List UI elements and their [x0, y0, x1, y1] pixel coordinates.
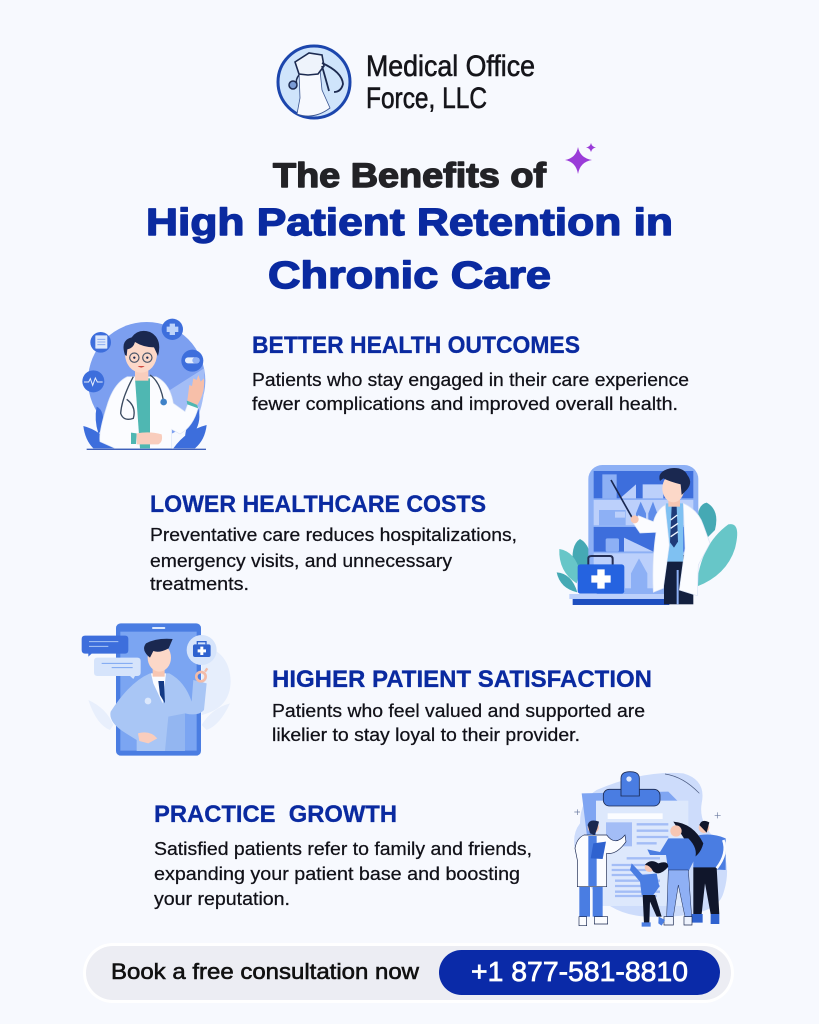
- icon: clipboard bubble: [90, 332, 111, 353]
- section: better health outcomes: Patients who stay engaged in their care experience: [252, 370, 689, 390]
- chat bubble dark: [82, 636, 128, 657]
- section: higher patient satisfaction: likelier to stay loyal to their provider.: [272, 725, 580, 745]
- title: Chronic Care: [268, 255, 551, 297]
- section: higher patient satisfaction: [272, 666, 652, 745]
- figure: doctor: [575, 821, 626, 926]
- phone number button: [439, 950, 720, 995]
- section: practice growth: expanding your patient base and boosting: [154, 864, 520, 884]
- phone number button: +1 877-581-8810: [471, 956, 688, 987]
- section: practice growth: Satisfied patients refer to family and friends,: [154, 839, 532, 859]
- logo emblem: [278, 46, 350, 118]
- icon: pulse bubble: [82, 370, 104, 392]
- illustration: doctor with health icons: [82, 319, 207, 450]
- section: lower healthcare costs: emergency visits, and unnecessary: [150, 551, 452, 571]
- title: [146, 157, 673, 297]
- title: High Patient Retention in: [146, 202, 673, 244]
- clipboard clip: [603, 772, 660, 806]
- section: better health outcomes: [252, 332, 689, 414]
- icon: medical cross bubble: [162, 319, 183, 340]
- title: The Benefits of: [273, 157, 547, 195]
- logo wordmark: Force, LLC: [366, 82, 487, 115]
- icon: medical kit bubble: [187, 635, 217, 665]
- illustration: doctor on tablet: [82, 623, 231, 756]
- section: lower healthcare costs: [150, 491, 517, 594]
- chat bubble light: [94, 658, 141, 679]
- section: practice growth: your reputation.: [154, 889, 290, 909]
- section: lower healthcare costs: LOWER HEALTHCARE COSTS: [150, 491, 486, 518]
- section: higher patient satisfaction: HIGHER PATIENT SATISFACTION: [272, 666, 652, 693]
- section: better health outcomes: BETTER HEALTH OUTCOMES: [252, 332, 580, 359]
- logo: [278, 46, 535, 118]
- figure: woman: [647, 822, 703, 925]
- section: practice growth: [154, 801, 532, 909]
- section: lower healthcare costs: treatments.: [150, 574, 249, 594]
- icon: pill bubble: [181, 350, 203, 372]
- illustration: doctor at medicine cabinet: [557, 465, 737, 605]
- section: lower healthcare costs: Preventative care reduces hospitalizations,: [150, 525, 517, 545]
- call to action bar: [83, 943, 734, 1003]
- figure: child: [630, 861, 668, 927]
- illustration: doctor and family with clipboard: [574, 772, 727, 927]
- call to action text: Book a free consultation now: [111, 959, 419, 984]
- section: better health outcomes: fewer complications and improved overall health.: [252, 394, 678, 414]
- figure: man: [692, 821, 726, 924]
- logo wordmark: Medical Office: [366, 50, 535, 83]
- logo wordmark: [366, 50, 535, 115]
- icon: purple sparkle: [565, 143, 596, 174]
- section: practice growth: PRACTICE GROWTH: [154, 801, 397, 828]
- section: higher patient satisfaction: Patients who feel valued and supported are: [272, 701, 645, 721]
